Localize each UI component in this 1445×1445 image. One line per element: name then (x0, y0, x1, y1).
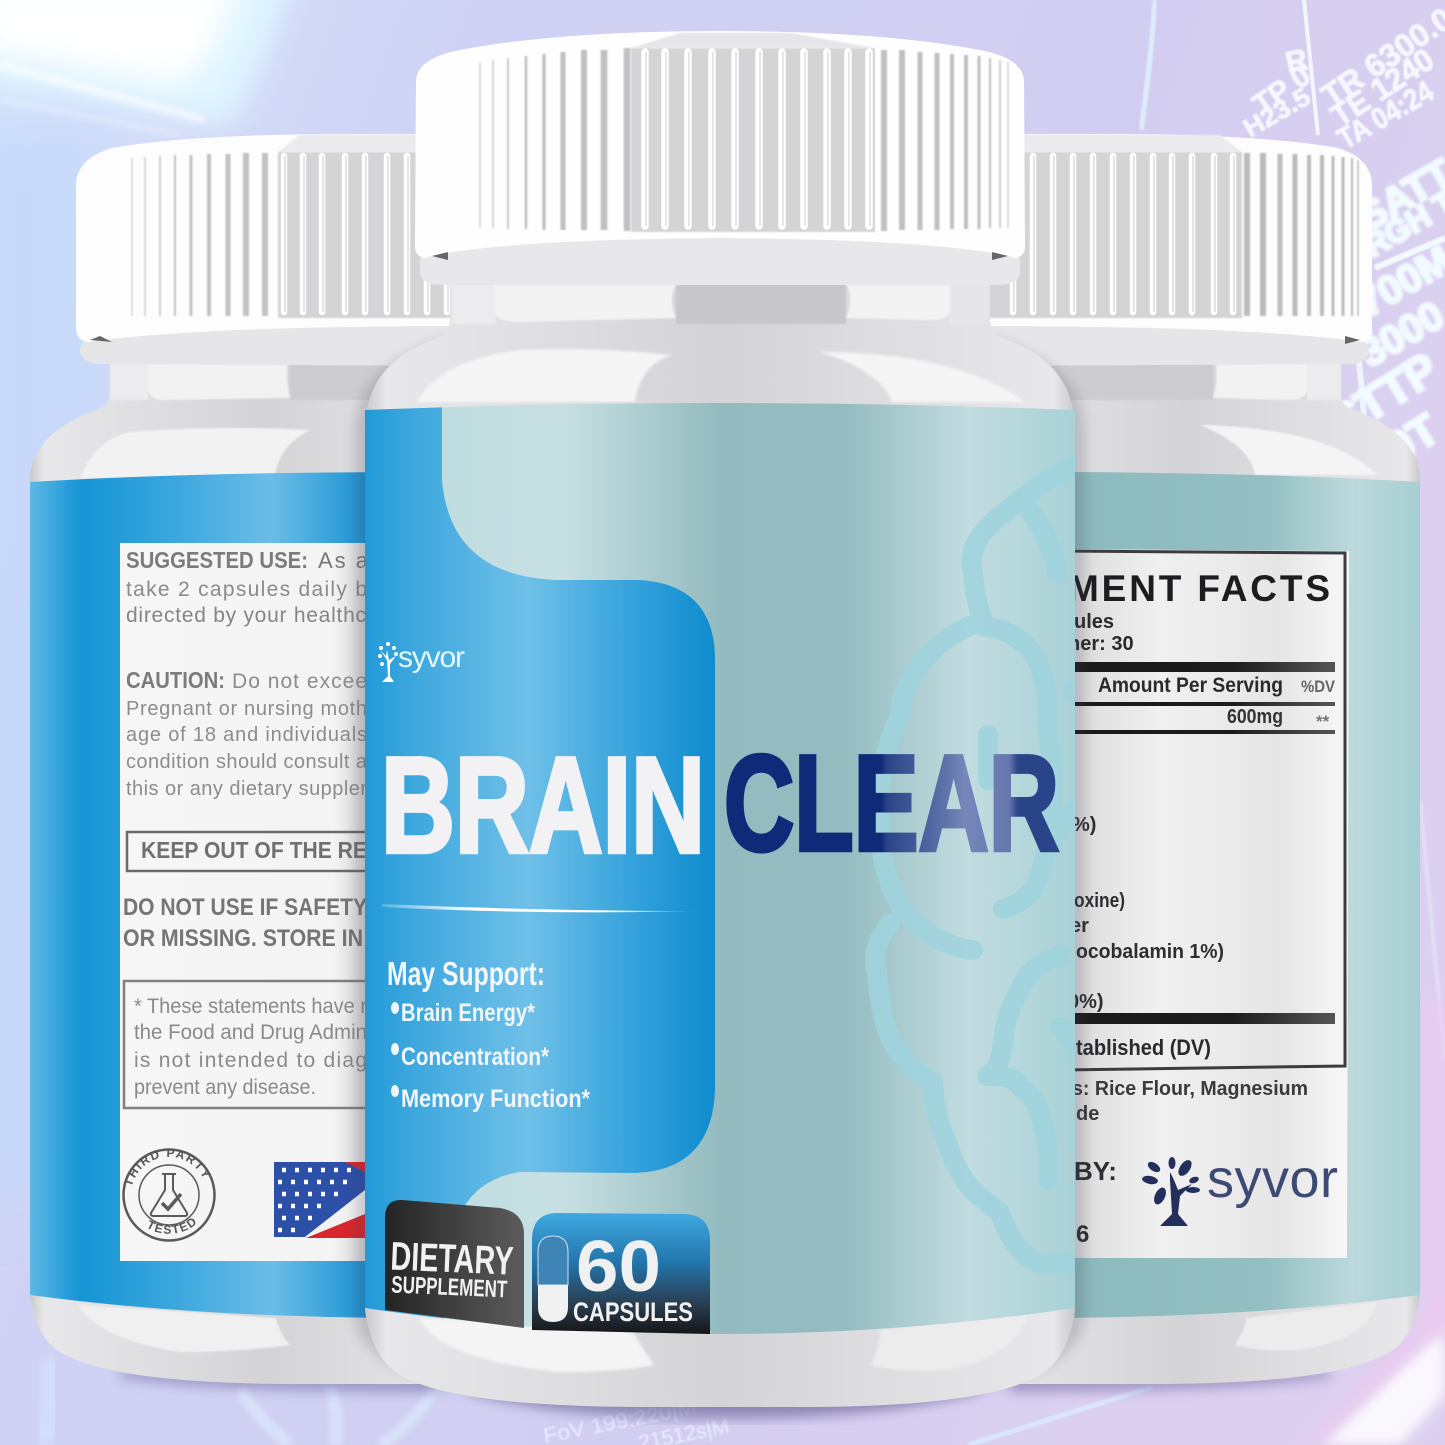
bottle ground shadows (120, 1370, 1330, 1420)
syvor small logo (378, 641, 465, 682)
background blurred data blocks: STTP (1320, 342, 1445, 448)
third party tested seal: TESTED (148, 1218, 196, 1234)
title: Brain Clear: CLEAR (724, 727, 1059, 879)
heading: supplement facts: MENT FACTS (1068, 568, 1330, 609)
facts table: ** (1316, 712, 1330, 731)
keep out of reach box: KEEP OUT OF THE RE (141, 837, 367, 863)
front label (355, 395, 1085, 1340)
safety warning (123, 894, 367, 952)
60 capsules badge: 60 (576, 1227, 661, 1307)
icon: brain outline watermark (875, 462, 1085, 1263)
third party tested seal: THIRD PARTY (126, 1150, 208, 1184)
background blurred data blocks (1320, 151, 1445, 486)
third party tested seal (122, 1148, 216, 1242)
left neck reflections (78, 352, 450, 1352)
suggested use text: take 2 capsules daily b (126, 578, 367, 601)
background blurred data blocks: 10T (1357, 405, 1445, 486)
dietary supplement badge (385, 1200, 524, 1328)
serving lines: ules (1074, 611, 1114, 633)
caution text: Pregnant or nursing moth (126, 698, 367, 720)
left bottle: back label (30, 134, 450, 1384)
supplement facts box (1060, 551, 1345, 1070)
60 capsules badge (532, 1213, 710, 1334)
front bottom highlights (419, 1312, 1028, 1372)
may support list: Brain Energy* (401, 999, 535, 1027)
dietary supplement badge: DIETARY (390, 1235, 515, 1284)
caution text: Do not excee (232, 670, 367, 693)
divider line (382, 904, 698, 912)
may support list: Concentration* (401, 1043, 549, 1071)
FDA disclaimer box: * These statements have r (134, 995, 367, 1018)
suggested use text: directed by your healthc (126, 604, 366, 627)
safety warning: OR MISSING. STORE IN (123, 925, 363, 952)
front bottle (355, 31, 1085, 1407)
right bottle teal label (1074, 472, 1420, 1318)
left bottle shell (30, 340, 500, 1384)
FDA disclaimer box (124, 981, 384, 1108)
background data text: R (1283, 43, 1311, 80)
right bottle shell (950, 340, 1420, 1384)
background data text: TE 1240 (1324, 41, 1440, 134)
right bottle: supplement facts label (950, 134, 1420, 1384)
right neck reflections (1000, 352, 1378, 1350)
left white panel (120, 543, 380, 1261)
facts table (1060, 662, 1336, 1060)
front bottle shadow on back bottles (355, 340, 1085, 1410)
caution text: age of 18 and individuals (126, 724, 367, 746)
facts table: oxine) (1074, 890, 1125, 912)
FDA disclaimer box: prevent any disease. (134, 1076, 316, 1099)
syvor small logo: syvor (398, 641, 465, 674)
dietary supplement badge: SUPPLEMENT (391, 1272, 508, 1303)
distributed by text: 6 (1076, 1221, 1089, 1248)
facts table: Amount Per Serving (1098, 674, 1283, 697)
icon: capsule (538, 1236, 568, 1322)
caution text (126, 667, 368, 800)
suggested use text: As a (318, 548, 369, 573)
other ingredients text (1072, 1078, 1308, 1125)
caution text: this or any dietary suppler (126, 778, 367, 800)
serving lines (1068, 611, 1134, 655)
left bottle blue label (30, 472, 366, 1318)
teal label field (365, 395, 1075, 1340)
may support list (387, 955, 590, 1113)
distributed by text: BY: (1074, 1156, 1117, 1186)
other ingredients text: de (1076, 1103, 1099, 1125)
front shoulder highlights (417, 349, 1025, 402)
background data text: H23.5 (1238, 81, 1315, 143)
may support list: May Support: (387, 955, 545, 992)
icon: small tree (378, 642, 398, 682)
caution text: CAUTION: (126, 667, 225, 693)
left bottle cap (76, 134, 470, 366)
serving lines: her: 30 (1068, 633, 1134, 655)
background data text: TP 0 (1247, 59, 1317, 122)
front neck ring (420, 232, 1020, 285)
blue panel (355, 395, 715, 1340)
facts table: tablished (DV) (1076, 1035, 1211, 1060)
facts table: ocobalamin 1%) (1076, 941, 1224, 963)
FDA disclaimer box: is not intended to diag (134, 1049, 367, 1072)
title: Brain Clear: BRAIN (381, 729, 705, 881)
keep out of reach box (127, 832, 387, 871)
suggested use text: SUGGESTED USE: (126, 547, 308, 573)
front bottle shell (365, 280, 1075, 1407)
right white panel (1060, 549, 1349, 1258)
syvor logo: syvor (1207, 1149, 1338, 1209)
facts table: 0%) (1068, 991, 1104, 1013)
USA flag (274, 1162, 365, 1238)
suggested use text (126, 547, 369, 627)
front neck reflections (452, 284, 988, 324)
caution text: condition should consult a (126, 751, 368, 773)
FDA disclaimer box: the Food and Drug Admin (134, 1021, 367, 1044)
icon: syvor tree (1141, 1157, 1200, 1226)
distributed by text (1074, 1156, 1117, 1248)
front bottle cap (415, 31, 1025, 260)
facts table: er (1070, 915, 1089, 937)
background data text (1238, 0, 1445, 156)
60 capsules badge: CAPSULES (573, 1297, 693, 1327)
title: Brain Clear (381, 727, 1059, 881)
facts table: 600mg (1227, 706, 1283, 728)
facts table: %) (1072, 814, 1096, 836)
may support list: Memory Function* (401, 1085, 590, 1113)
safety warning: DO NOT USE IF SAFETY (123, 894, 367, 921)
syvor logo (1141, 1149, 1338, 1226)
right bottle cap (980, 134, 1372, 366)
facts table: %DV (1301, 677, 1336, 696)
background bottom reflections (40, 1000, 1445, 1445)
other ingredients text: s: Rice Flour, Magnesium (1072, 1078, 1308, 1100)
